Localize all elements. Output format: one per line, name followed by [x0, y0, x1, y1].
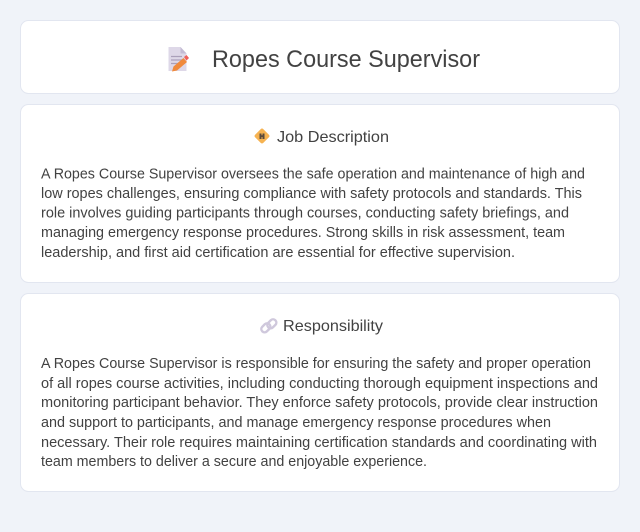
- heading: job description: Job Description: [277, 129, 389, 146]
- text block: responsibility: necessary. Their role requires maintaining certification standards and coordinating with: [41, 435, 597, 451]
- icon: diamond road sign: [254, 128, 270, 144]
- title: Ropes Course Supervisor: [212, 46, 480, 73]
- panel: title card: [20, 20, 620, 94]
- text block: job description: leadership, and first aid certification are essential for effective supervision.: [41, 245, 515, 261]
- text block: job description: managing emergency response procedures. Strong skills in risk assessment, team: [41, 225, 565, 241]
- panel: responsibility: [20, 294, 620, 492]
- text block: responsibility: team members to deliver a secure and enjoyable experience.: [41, 454, 427, 470]
- text block: responsibility: and support to participants, and manage emergency response procedures when: [41, 415, 551, 431]
- icon: document with pencil: [168, 47, 189, 72]
- text block: job description: A Ropes Course Supervisor oversees the safe operation and maintenance of high and: [41, 166, 585, 182]
- text block: job description: role involves guiding participants through courses, conducting safety briefings, and: [41, 206, 569, 222]
- text block: responsibility: of all ropes course activities, including conducting thorough equipment inspections and: [41, 376, 598, 392]
- text block: job description: [41, 166, 585, 261]
- heading: responsibility: Responsibility: [283, 318, 383, 335]
- icon: chain link: [260, 318, 278, 334]
- text block: responsibility: [41, 356, 598, 470]
- text block: job description: low ropes challenges, ensuring compliance with safety protocols and standards. This: [41, 186, 582, 202]
- panel: job description: [20, 104, 620, 282]
- text block: responsibility: A Ropes Course Supervisor is responsible for ensuring the safety and proper operation: [41, 356, 591, 372]
- text block: responsibility: monitoring participant behavior. They enforce safety protocols, provide clear instruction: [41, 395, 598, 411]
